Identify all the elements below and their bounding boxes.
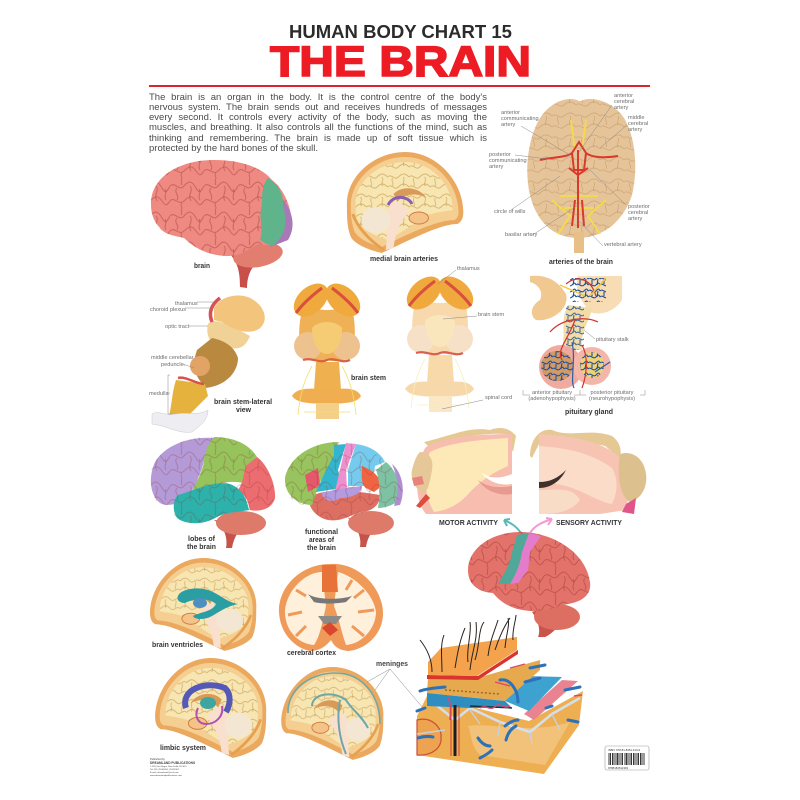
intro paragraph <box>149 92 487 154</box>
leader lines <box>167 302 214 414</box>
arrow: to motor activity <box>504 519 521 533</box>
sulci <box>288 580 374 636</box>
panel: functional areas of the brain: areas of <box>309 537 335 544</box>
publisher imprint <box>150 757 195 777</box>
panel: brain stem lateral view: brain stem-lateral <box>214 399 272 406</box>
panel: brain stem lateral view: view <box>236 407 252 414</box>
panel: pituitary gland: anterior pituitary <box>532 390 572 396</box>
blue area <box>316 444 346 492</box>
red skin layer <box>427 650 518 680</box>
intro paragraph: The brain is an organ in the body. It is the control centre of the body's <box>149 92 487 102</box>
label: medial brain arteries <box>370 256 438 263</box>
labels: anterior <box>614 93 633 99</box>
blue dura wedge <box>427 693 512 708</box>
sagittal section <box>150 558 256 651</box>
brain tissue <box>417 434 512 514</box>
panel: meninges section <box>281 661 423 760</box>
thalamus centre <box>200 697 216 709</box>
panel: labelled pale brain stem <box>400 266 512 412</box>
publisher imprint: www.dreamlandpublications.com <box>150 774 182 777</box>
stalk <box>562 305 592 350</box>
blue membrane <box>505 676 562 711</box>
panel: arteries of the brain <box>489 93 650 266</box>
capillary network <box>541 351 573 381</box>
labels: cerebral <box>628 210 648 216</box>
intro paragraph: protected by the hard bones of the skull. <box>149 143 318 154</box>
label: lobes of <box>188 536 216 543</box>
cerebellum <box>194 338 238 388</box>
teal-green area <box>376 462 400 508</box>
panel: meninges tissue block <box>417 615 583 774</box>
vessels <box>550 279 598 388</box>
label: MOTOR ACTIVITY <box>439 520 498 527</box>
panel: cerebral cortex <box>279 564 383 657</box>
publisher imprint: E-mail: dreamland@vsnl.com <box>150 771 179 774</box>
panel: pituitary gland <box>523 276 645 416</box>
white matter left <box>285 572 326 645</box>
main title: THE BRAIN <box>270 38 531 86</box>
leader lines <box>511 105 627 246</box>
leader lines <box>438 270 483 409</box>
arteries <box>540 142 618 228</box>
bars <box>609 753 644 765</box>
publisher imprint: J-128, Kirti Nagar, New Delhi-110 015 <box>150 765 187 768</box>
face <box>412 452 432 494</box>
panel: sensory activity section <box>530 430 646 527</box>
skin <box>428 637 517 676</box>
brain tissue base <box>417 691 583 774</box>
publisher imprint: Published by <box>150 757 166 761</box>
panel: labelled pale brain stem: brain stem <box>478 312 504 318</box>
labels: anterior <box>501 110 520 116</box>
ventricle slit <box>481 472 512 484</box>
label: SENSORY ACTIVITY <box>556 520 622 527</box>
labels: cerebral <box>628 121 648 127</box>
panel: brain stem lateral view: choroid plexus <box>150 307 186 313</box>
cerebrum <box>468 532 590 611</box>
intro paragraph: every second. It controls every activity of the body, such as moving the <box>149 112 487 123</box>
ventricle <box>177 588 238 619</box>
temporal area <box>309 491 380 520</box>
labels: thalamus <box>457 266 480 272</box>
orange area <box>362 466 382 492</box>
labels: posterior <box>489 152 511 158</box>
labels: basilar artery <box>505 232 538 238</box>
central orange <box>322 565 338 592</box>
panel: brain stem lateral view: medulla <box>149 391 169 397</box>
pink membrane <box>524 680 578 720</box>
panel: pituitary gland: (adenohypophysis) <box>528 396 576 402</box>
panel: brain stem <box>287 277 386 419</box>
fornix <box>196 706 222 724</box>
ventricles <box>308 594 352 604</box>
central vessel <box>454 705 456 756</box>
stem and cerebellum <box>228 248 258 288</box>
panel: brain ventricles <box>150 558 256 651</box>
thalamus <box>214 296 265 332</box>
meninges lining <box>288 673 380 724</box>
labels: artery <box>614 105 629 111</box>
face <box>619 453 646 502</box>
cranial nerves <box>552 120 606 234</box>
panel: brain stem lateral view: middle cerebellar <box>151 355 194 361</box>
barcode frame <box>605 746 649 770</box>
green lobe <box>260 178 286 245</box>
leader lines <box>367 669 423 708</box>
artery detail <box>388 197 412 205</box>
brain underside <box>527 99 635 238</box>
gyri <box>285 442 403 520</box>
inner lining <box>312 694 368 754</box>
panel: limbic system <box>155 658 266 758</box>
panel: side view of brain <box>151 160 293 288</box>
tan skull tissue <box>530 430 621 458</box>
panel: brain stem lateral view: optic tract <box>165 324 190 330</box>
label: brain: brain <box>194 263 210 270</box>
stem illustration <box>292 304 361 419</box>
label: brain stem <box>351 375 386 382</box>
stem and cerebellum <box>532 606 562 637</box>
publisher imprint: DREAMLAND PUBLICATIONS <box>150 761 195 765</box>
labels: vertebral artery <box>604 242 642 248</box>
label: limbic system <box>160 745 206 752</box>
gyri <box>150 437 275 523</box>
white matter right <box>334 572 376 645</box>
labels: artery <box>501 122 516 128</box>
title block <box>270 21 531 86</box>
panel: lobes of the brain <box>150 437 275 551</box>
labels: pituitary stalk <box>596 337 629 343</box>
labels: posterior <box>628 204 650 210</box>
ventricle slit <box>539 470 566 488</box>
publisher imprint: Tel: 011-25106050, 25415362 <box>150 769 180 771</box>
labels: artery <box>489 164 504 170</box>
barcode digits: 9788184511349 <box>608 766 628 770</box>
cerebellum and stem <box>214 520 248 548</box>
sensory strip <box>510 533 541 584</box>
intro paragraph: nervous system. The brain sends out and receives hundreds of messages <box>149 102 487 113</box>
labels: artery <box>628 127 643 133</box>
sagittal section <box>155 658 266 758</box>
outer cortex <box>279 564 383 651</box>
limbic arc <box>185 685 230 712</box>
labels: thalamus <box>175 301 198 307</box>
skull bone <box>427 660 540 701</box>
ISBN: ISBN: 978-81-8451-134-9 <box>608 748 640 752</box>
panel: functional areas of the brain <box>285 442 403 552</box>
panel: motor activity section <box>412 428 516 527</box>
red area <box>305 468 320 492</box>
labels: communicating <box>489 158 527 164</box>
green area <box>285 442 338 505</box>
panel: brain with motor and sensory strips <box>468 532 590 637</box>
label: cerebral cortex <box>287 650 336 657</box>
label: brain ventricles <box>152 642 203 649</box>
panel: labelled pale brain stem: spinal cord <box>485 395 512 401</box>
panel: brain stem lateral view <box>149 296 272 432</box>
hair <box>420 615 516 672</box>
intro paragraph: thinking and remembering. The brain is made up of soft tissue which is <box>149 133 487 144</box>
label: functional <box>305 529 338 536</box>
motor strip <box>498 533 529 584</box>
panel: functional areas of the brain: the brain <box>307 545 336 552</box>
labels <box>489 93 650 248</box>
lavender strip <box>322 486 362 501</box>
gland lobes <box>539 345 583 389</box>
red lobe <box>238 457 275 511</box>
labels: communicating <box>501 116 539 122</box>
midbrain <box>207 321 250 348</box>
barcode <box>605 746 649 770</box>
subtitle: HUMAN BODY CHART 15 <box>289 21 512 42</box>
panel: pituitary gland: posterior pituitary <box>591 390 634 396</box>
labels: cerebral <box>614 99 634 105</box>
spinal bone <box>152 410 208 432</box>
labels: artery <box>628 216 643 222</box>
pink strip <box>335 443 356 491</box>
intro paragraph: muscles, and breathing. It also controls all the functions of the mind, such as <box>149 122 487 133</box>
blood vessels <box>417 665 580 758</box>
pale stem illustration <box>405 297 474 412</box>
panel: brain stem lateral view: peduncle. <box>161 362 186 368</box>
panel: pituitary gland: (neurohypophysis) <box>589 396 635 402</box>
panel: lobes of the brain: the brain <box>187 544 216 551</box>
sagittal section <box>347 152 463 253</box>
white arachnoid web <box>430 698 580 732</box>
medulla <box>169 380 208 416</box>
panel: medial brain arteries <box>347 152 463 263</box>
parietal/occipital lobe <box>151 438 214 505</box>
panel: pituitary gland: pituitary gland <box>565 409 613 416</box>
labels: circle of wills <box>494 209 526 215</box>
cerebellum and stem <box>348 518 382 547</box>
light blue area <box>348 444 385 486</box>
label: meninges <box>376 661 408 668</box>
arrow: to sensory activity <box>530 518 552 533</box>
teal lobe <box>174 483 249 523</box>
tan tissue <box>530 276 567 320</box>
cerebrum <box>151 160 292 256</box>
panel: arteries of the brain: arteries of the brain <box>549 259 613 266</box>
tan skull tissue <box>424 428 516 452</box>
labels: middle <box>628 115 644 121</box>
purple lobe edge <box>270 196 293 247</box>
brain tissue <box>539 434 628 514</box>
leader and bracket lines <box>523 330 645 395</box>
green lobe <box>192 437 257 491</box>
sagittal section <box>281 667 383 760</box>
